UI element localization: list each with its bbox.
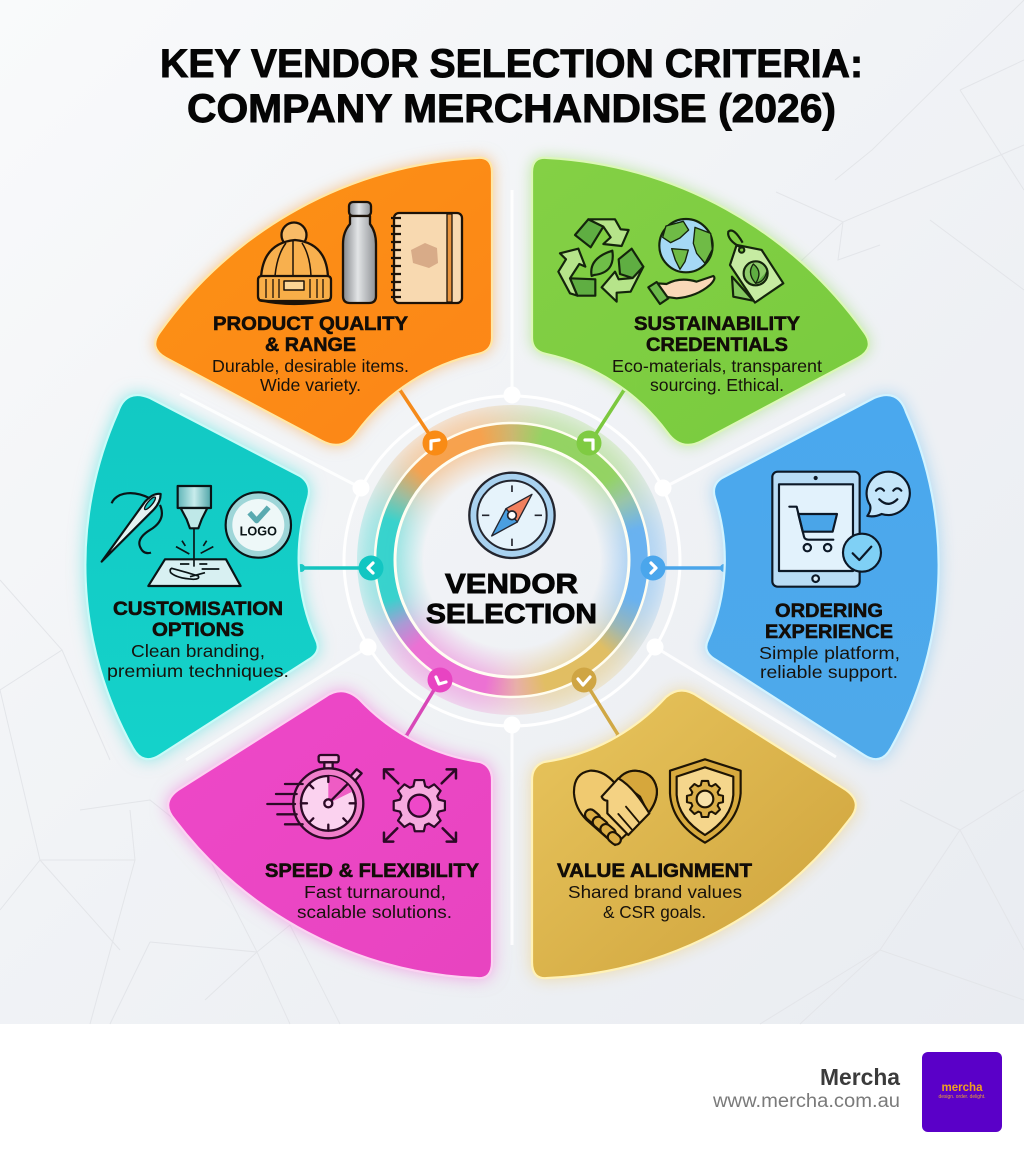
description: sustainability	[612, 356, 822, 395]
description: product quality	[212, 356, 409, 395]
footer: logo: mercha	[942, 1082, 983, 1094]
description: ordering experience: reliable support.	[760, 662, 898, 682]
footer: logo: design. order. delight.	[938, 1094, 986, 1100]
connector: blue	[640, 556, 728, 580]
heading: customisation: CUSTOMISATION	[113, 598, 283, 620]
title: KEY VENDOR SELECTION CRITERIA:	[160, 42, 863, 86]
heading: product quality: PRODUCT QUALITY	[213, 313, 408, 335]
spokes and outer ring	[180, 190, 845, 945]
description: value alignment: & CSR goals.	[603, 902, 706, 922]
heading: sustainability: CREDENTIALS	[646, 334, 788, 356]
connector: magenta	[401, 668, 452, 742]
ring outlines	[375, 423, 649, 697]
panel shape: teal	[85, 395, 318, 759]
description: customisation: Clean branding,	[131, 641, 265, 661]
central multi-colour ring	[375, 423, 649, 697]
panel shape: magenta	[168, 691, 492, 978]
description: ordering experience	[759, 643, 900, 682]
panel: value alignment	[532, 668, 856, 978]
centre label: VENDOR	[445, 568, 578, 599]
heading: customisation: OPTIONS	[152, 619, 244, 641]
footer: brand name and url	[712, 1064, 900, 1112]
panel: sustainability credentials	[532, 158, 869, 456]
connector: teal	[297, 556, 384, 580]
panel shape: blue	[706, 395, 939, 759]
panel shape: green	[532, 158, 869, 445]
icon: needle, laser and logo badge	[102, 486, 291, 586]
icon: handshake heart and shield gear	[574, 759, 741, 847]
description: sustainability: sourcing. Ethical.	[650, 375, 784, 395]
description: customisation: premium techniques.	[107, 661, 289, 681]
footer: brand name and url: Mercha	[820, 1064, 900, 1090]
icon: recycle, globe and eco tag	[558, 219, 783, 304]
heading: ordering experience: EXPERIENCE	[765, 621, 893, 643]
description: ordering experience: Simple platform,	[759, 643, 900, 663]
description: value alignment	[568, 882, 742, 922]
heading: value alignment: VALUE ALIGNMENT	[557, 860, 752, 882]
centre label	[426, 568, 597, 629]
heading: sustainability	[634, 313, 800, 356]
heading: product quality: & RANGE	[265, 334, 356, 356]
panel: speed and flexibility	[168, 668, 492, 978]
centre label: SELECTION	[426, 598, 597, 629]
icon: tablet with cart and smiley	[772, 472, 910, 587]
central ring glow	[357, 405, 667, 715]
title	[160, 42, 863, 131]
panel shape: orange	[155, 158, 492, 445]
icon: stopwatch and gear with arrows	[267, 755, 456, 842]
heading: ordering experience: ORDERING	[775, 600, 883, 622]
description: product quality: Durable, desirable items.	[212, 356, 409, 376]
footer: brand name and url: www.mercha.com.au	[712, 1091, 900, 1112]
description: speed and flexibility: Fast turnaround,	[304, 882, 446, 902]
panel shape: gold	[532, 690, 856, 978]
panel: customisation options	[85, 395, 384, 759]
description: product quality: Wide variety.	[260, 375, 361, 395]
connector: green	[576, 384, 630, 456]
description: sustainability: Eco-materials, transparent	[612, 356, 822, 376]
icon: beanie, bottle and notebook	[258, 202, 462, 304]
footer: logo	[922, 1052, 1002, 1132]
title: COMPANY MERCHANDISE (2026)	[187, 87, 836, 131]
heading: speed and flexibility: SPEED & FLEXIBILITY	[265, 860, 479, 882]
icon: compass	[469, 473, 555, 558]
heading: ordering experience	[765, 600, 893, 643]
icon: needle, laser and logo badge: LOGO	[240, 525, 277, 539]
heading: product quality	[213, 313, 408, 356]
panel: ordering experience	[640, 395, 939, 759]
description: customisation	[107, 641, 289, 681]
description: speed and flexibility	[297, 882, 452, 922]
panel: product quality and range	[155, 158, 492, 456]
heading: customisation	[113, 598, 283, 641]
connector: orange	[394, 384, 448, 456]
heading: sustainability: SUSTAINABILITY	[634, 313, 800, 335]
description: value alignment: Shared brand values	[568, 882, 742, 902]
description: speed and flexibility: scalable solutions.	[297, 902, 452, 922]
connector: gold	[572, 668, 623, 742]
